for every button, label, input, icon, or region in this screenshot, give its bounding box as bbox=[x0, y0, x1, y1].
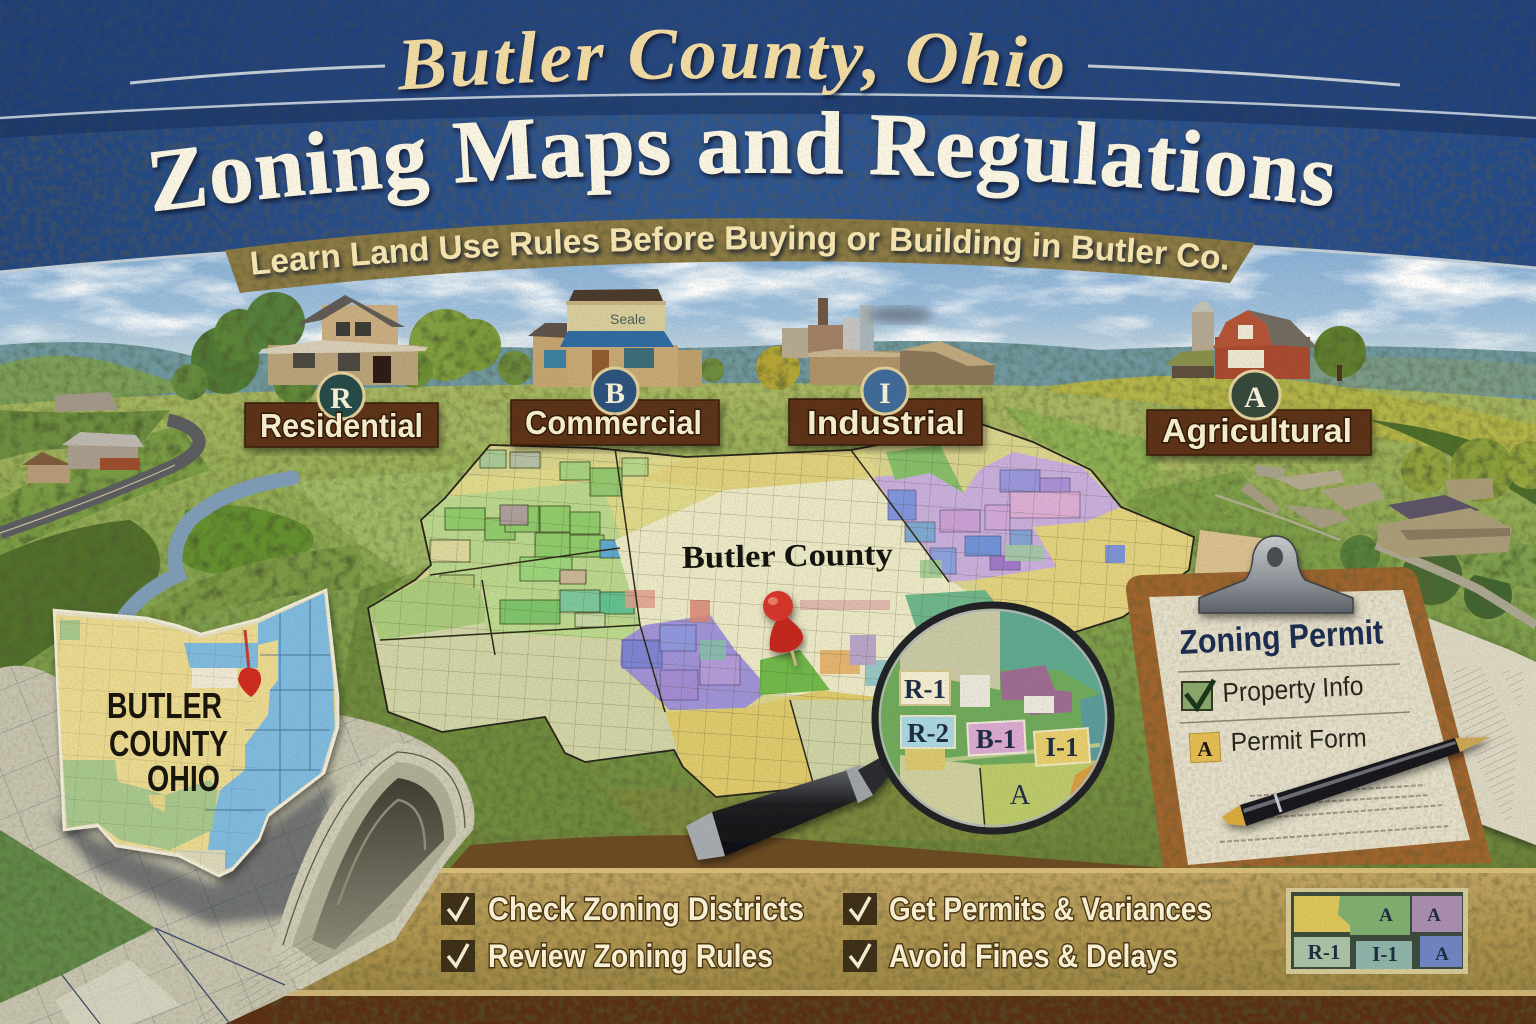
paper grid lines bbox=[0, 666, 475, 1024]
zone sign: Residential: R bbox=[330, 382, 352, 415]
mini zoning map legend bbox=[1286, 888, 1468, 974]
Ohio map label: COUNTY bbox=[109, 723, 228, 764]
title line 1: Butler County, Ohio bbox=[398, 30, 1067, 100]
check: property info bbox=[1182, 671, 1364, 710]
zone: centre cream bbox=[615, 464, 967, 697]
green map sheet bbox=[0, 830, 155, 1003]
zone: top-centre yellow bbox=[640, 450, 870, 490]
zone: pin meadow green bbox=[760, 650, 830, 695]
zone sign: Commercial: Commercial bbox=[525, 404, 702, 441]
mini zoning map legend: A bbox=[1379, 905, 1393, 926]
zone tag B-1 bbox=[967, 721, 1026, 755]
building: residential house bbox=[172, 292, 501, 404]
zone sign: Industrial bbox=[789, 368, 982, 445]
building: commercial shop: Seale bbox=[610, 311, 646, 327]
lower table print bbox=[55, 960, 180, 1024]
zone sign: Agricultural: Agricultural bbox=[1162, 412, 1352, 449]
title line 2: Zoning Maps and Regulations bbox=[150, 110, 1336, 216]
zone sign: Residential: Residential bbox=[260, 407, 423, 444]
county zoning map bbox=[360, 420, 1210, 810]
back papers bbox=[1190, 530, 1536, 845]
check item: Get Permits & Variances: Get Permits & Variances bbox=[889, 891, 1212, 927]
folded paper map with curl bbox=[0, 666, 475, 1024]
road bbox=[0, 420, 199, 533]
Ohio map label: BUTLER bbox=[107, 685, 222, 726]
zone tag R-2: R-2 bbox=[907, 718, 949, 748]
blue header banner bbox=[0, 0, 1536, 272]
mini zoning map legend: A bbox=[1427, 905, 1441, 926]
mini zoning map legend: R-1 bbox=[1308, 940, 1340, 964]
Ohio map pin bbox=[238, 630, 261, 697]
zone: northern yellow band bbox=[440, 440, 880, 548]
check item: Check Zoning Districts: Check Zoning Districts bbox=[488, 891, 804, 927]
Ohio green south-west bbox=[60, 760, 218, 850]
zone sign: Commercial: B bbox=[605, 377, 625, 410]
bottom land shading bbox=[440, 835, 1165, 880]
left farm buildings bbox=[22, 392, 144, 483]
subtitle ribbon bbox=[225, 218, 1255, 293]
zone: eastern yellow bbox=[974, 507, 1200, 640]
handle bbox=[686, 755, 890, 860]
zone: lower green south of east bbox=[905, 590, 994, 628]
Ohio map label: OHIO bbox=[147, 758, 220, 799]
district boundaries bbox=[380, 448, 949, 790]
checklist bbox=[441, 891, 1212, 974]
check: permit form: Permit Form bbox=[1230, 722, 1367, 757]
Ohio state map bbox=[50, 590, 350, 880]
clipboard bbox=[1126, 530, 1536, 868]
check: property info: Property Info bbox=[1222, 671, 1364, 708]
mini zoning map legend: I-1 bbox=[1372, 942, 1398, 966]
building: agricultural barn bbox=[1165, 301, 1366, 381]
curled sheet middle arch bbox=[292, 762, 456, 965]
river bbox=[122, 478, 292, 620]
metal clip bbox=[1199, 536, 1353, 613]
zone sign: Industrial: I bbox=[879, 377, 891, 410]
check item: Avoid Fines & Delays: Avoid Fines & Delays bbox=[889, 938, 1178, 974]
zone: eastern purple bbox=[873, 452, 1121, 582]
subtitle: Learn Land Use Rules Before Buying or Building in Butler Co. bbox=[250, 225, 1232, 280]
Ohio white patch bbox=[192, 668, 237, 688]
zone: upper green cells bbox=[430, 450, 648, 589]
pen bbox=[1222, 737, 1490, 826]
zone: central purple bbox=[620, 615, 770, 710]
curled sheet outer arch bbox=[272, 743, 473, 990]
left forest, road and river bbox=[0, 410, 360, 680]
divider lines bbox=[1178, 664, 1410, 723]
right village buildings bbox=[1215, 438, 1536, 625]
zone sign: Industrial: Industrial bbox=[807, 404, 965, 441]
curl cave bbox=[312, 778, 444, 950]
permit heading: Zoning Permit bbox=[1178, 613, 1384, 662]
zone: north-east green strip bbox=[886, 445, 964, 493]
zone tag I-1: I-1 bbox=[1046, 732, 1078, 762]
check: permit form: A bbox=[1197, 737, 1213, 761]
footer gold panel bbox=[270, 868, 1536, 1024]
heading flourish lines bbox=[130, 66, 1400, 85]
shadow beneath Ohio bbox=[50, 780, 335, 925]
zone tag B-1: B-1 bbox=[976, 724, 1016, 754]
green landscape bbox=[0, 375, 1536, 880]
building: industrial plant bbox=[756, 298, 995, 390]
Ohio blue east bbox=[205, 590, 340, 880]
zone: purple blue cells bbox=[888, 470, 1080, 574]
zone tag R-1: R-1 bbox=[904, 674, 946, 704]
zone sign: Agricultural bbox=[1147, 371, 1371, 455]
map grid bbox=[360, 420, 1210, 810]
zone tag A: A bbox=[1010, 780, 1031, 811]
lens content bbox=[875, 605, 1115, 835]
zone sign: Commercial bbox=[511, 368, 719, 445]
red map pin bbox=[763, 591, 803, 666]
Ohio map label bbox=[107, 685, 228, 799]
building: commercial shop bbox=[498, 289, 724, 387]
check: permit form bbox=[1189, 722, 1367, 763]
clipboard board bbox=[1126, 567, 1492, 868]
lens ring bbox=[875, 605, 1111, 831]
magnifying glass bbox=[686, 605, 1115, 860]
wood footer background bbox=[0, 868, 1536, 1024]
zone tag I-1 bbox=[1034, 728, 1090, 766]
zone: southern pale bbox=[368, 575, 683, 767]
zone sign: Agricultural: A bbox=[1244, 381, 1266, 414]
fine print bbox=[1220, 785, 1450, 842]
zone: western green bbox=[421, 480, 640, 625]
distant hills bbox=[0, 341, 1536, 440]
zone sign: Residential bbox=[245, 373, 438, 447]
sky with clouds bbox=[0, 248, 1536, 356]
zone: southern yellow bbox=[665, 690, 874, 796]
check item: Review Zoning Rules: Review Zoning Rules bbox=[488, 938, 773, 974]
mini zoning map legend: A bbox=[1435, 944, 1449, 965]
map label: Butler County: Butler County bbox=[681, 535, 893, 575]
permit paper bbox=[1149, 590, 1470, 865]
zone: centre accents bbox=[625, 560, 942, 686]
